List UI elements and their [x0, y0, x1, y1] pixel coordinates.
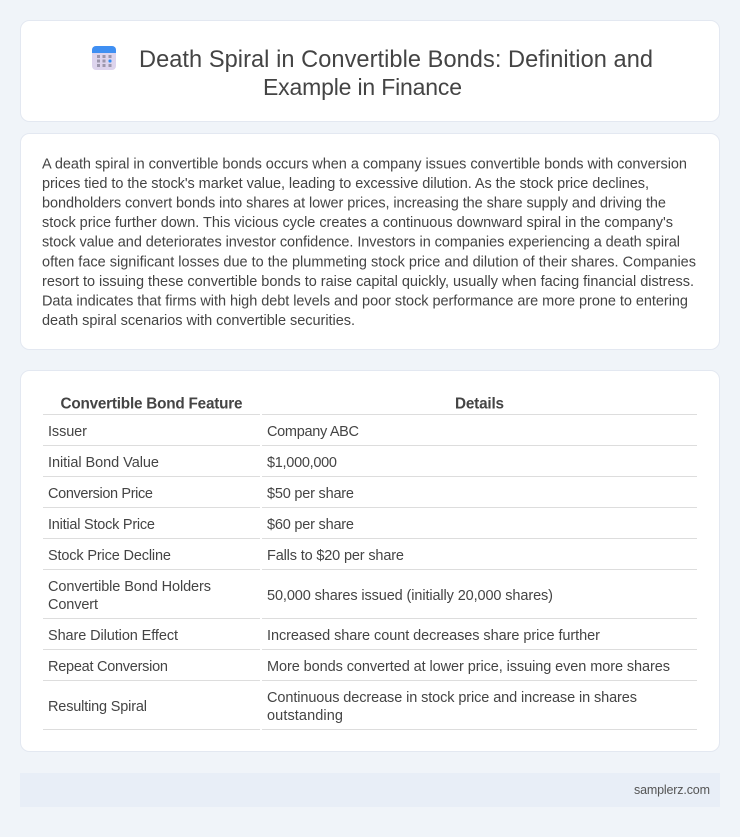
- row: stock price decline: Stock Price Decline: [48, 548, 171, 564]
- text block: definition paragraph: stock price further down. This vicious cycle creates a continuous downward spiral in the company's: [42, 215, 673, 231]
- row: conversion price: $50 per share: [267, 486, 354, 502]
- panel: table card: [20, 370, 720, 752]
- row: repeat conversion: More bonds converted at lower price, issuing even more shares: [267, 659, 670, 675]
- row: repeat conversion: [48, 659, 670, 675]
- row: initial stock price: $60 per share: [267, 517, 354, 533]
- row: resulting spiral: outstanding: [267, 708, 343, 724]
- row: holders convert: Convertible Bond Holders: [48, 579, 211, 595]
- row: stock price decline: [48, 548, 404, 564]
- row: initial bond value: $1,000,000: [267, 455, 337, 471]
- row: initial stock price: Initial Stock Price: [48, 517, 155, 533]
- row: repeat conversion: Repeat Conversion: [48, 659, 168, 675]
- row: share dilution effect: Increased share count decreases share price further: [267, 628, 600, 644]
- row: resulting spiral: Continuous decrease in stock price and increase in shares: [267, 690, 637, 706]
- row: initial bond value: Initial Bond Value: [48, 455, 159, 471]
- row: initial bond value: [48, 455, 337, 471]
- row: issuer: Issuer: [48, 424, 87, 440]
- table: convertible bond details: [43, 396, 697, 730]
- footer bar: [20, 773, 720, 807]
- icon: calendar: [92, 46, 116, 70]
- row: holders convert: [48, 579, 553, 613]
- table header: [60, 396, 504, 412]
- row: holders convert: 50,000 shares issued (initially 20,000 shares): [267, 588, 553, 604]
- table header: Convertible Bond Feature: [60, 396, 242, 412]
- row: resulting spiral: [48, 690, 637, 724]
- row: share dilution effect: Share Dilution Effect: [48, 628, 178, 644]
- text block: definition paragraph: [42, 156, 696, 329]
- row: resulting spiral: Resulting Spiral: [48, 699, 147, 715]
- text block: definition paragraph: often face significant losses due to the plummeting stock price and dilution of their shares. Companies: [42, 254, 696, 270]
- table header: Details: [455, 396, 504, 412]
- row: conversion price: [48, 486, 354, 502]
- text block: definition paragraph: A death spiral in convertible bonds occurs when a company issues convertible bonds with conversion: [42, 156, 687, 172]
- footer text: samplerz.com: [634, 783, 710, 797]
- row: share dilution effect: [48, 628, 600, 644]
- panel: description: [20, 134, 720, 350]
- title: Death Spiral in Convertible Bonds: Definition and: [139, 47, 653, 73]
- text block: definition paragraph: stock value and deteriorates investor confidence. Investors in companies experiencing a death spiral: [42, 235, 680, 251]
- row: issuer: Company ABC: [267, 424, 359, 440]
- text block: definition paragraph: bondholders convert bonds into shares at lower prices, increasing the share supply and driving the: [42, 196, 666, 212]
- row: stock price decline: Falls to $20 per share: [267, 548, 404, 564]
- panel: title header: [20, 20, 720, 122]
- row: holders convert: Convert: [48, 597, 98, 613]
- row: conversion price: Conversion Price: [48, 486, 153, 502]
- row: issuer: [48, 424, 359, 440]
- text block: definition paragraph: resort to issuing these convertible bonds to raise capital quickly, usually when facing financial distress.: [42, 274, 694, 290]
- row: initial stock price: [48, 517, 354, 533]
- title: [139, 47, 653, 100]
- title: Example in Finance: [263, 74, 462, 100]
- text block: definition paragraph: death spiral scenarios with convertible securities.: [42, 313, 355, 329]
- text block: definition paragraph: prices tied to the stock's market value, leading to excessive dilution. As the stock price declines,: [42, 176, 649, 192]
- text block: definition paragraph: Data indicates that firms with high debt levels and poor stock performance are more prone to entering: [42, 294, 688, 310]
